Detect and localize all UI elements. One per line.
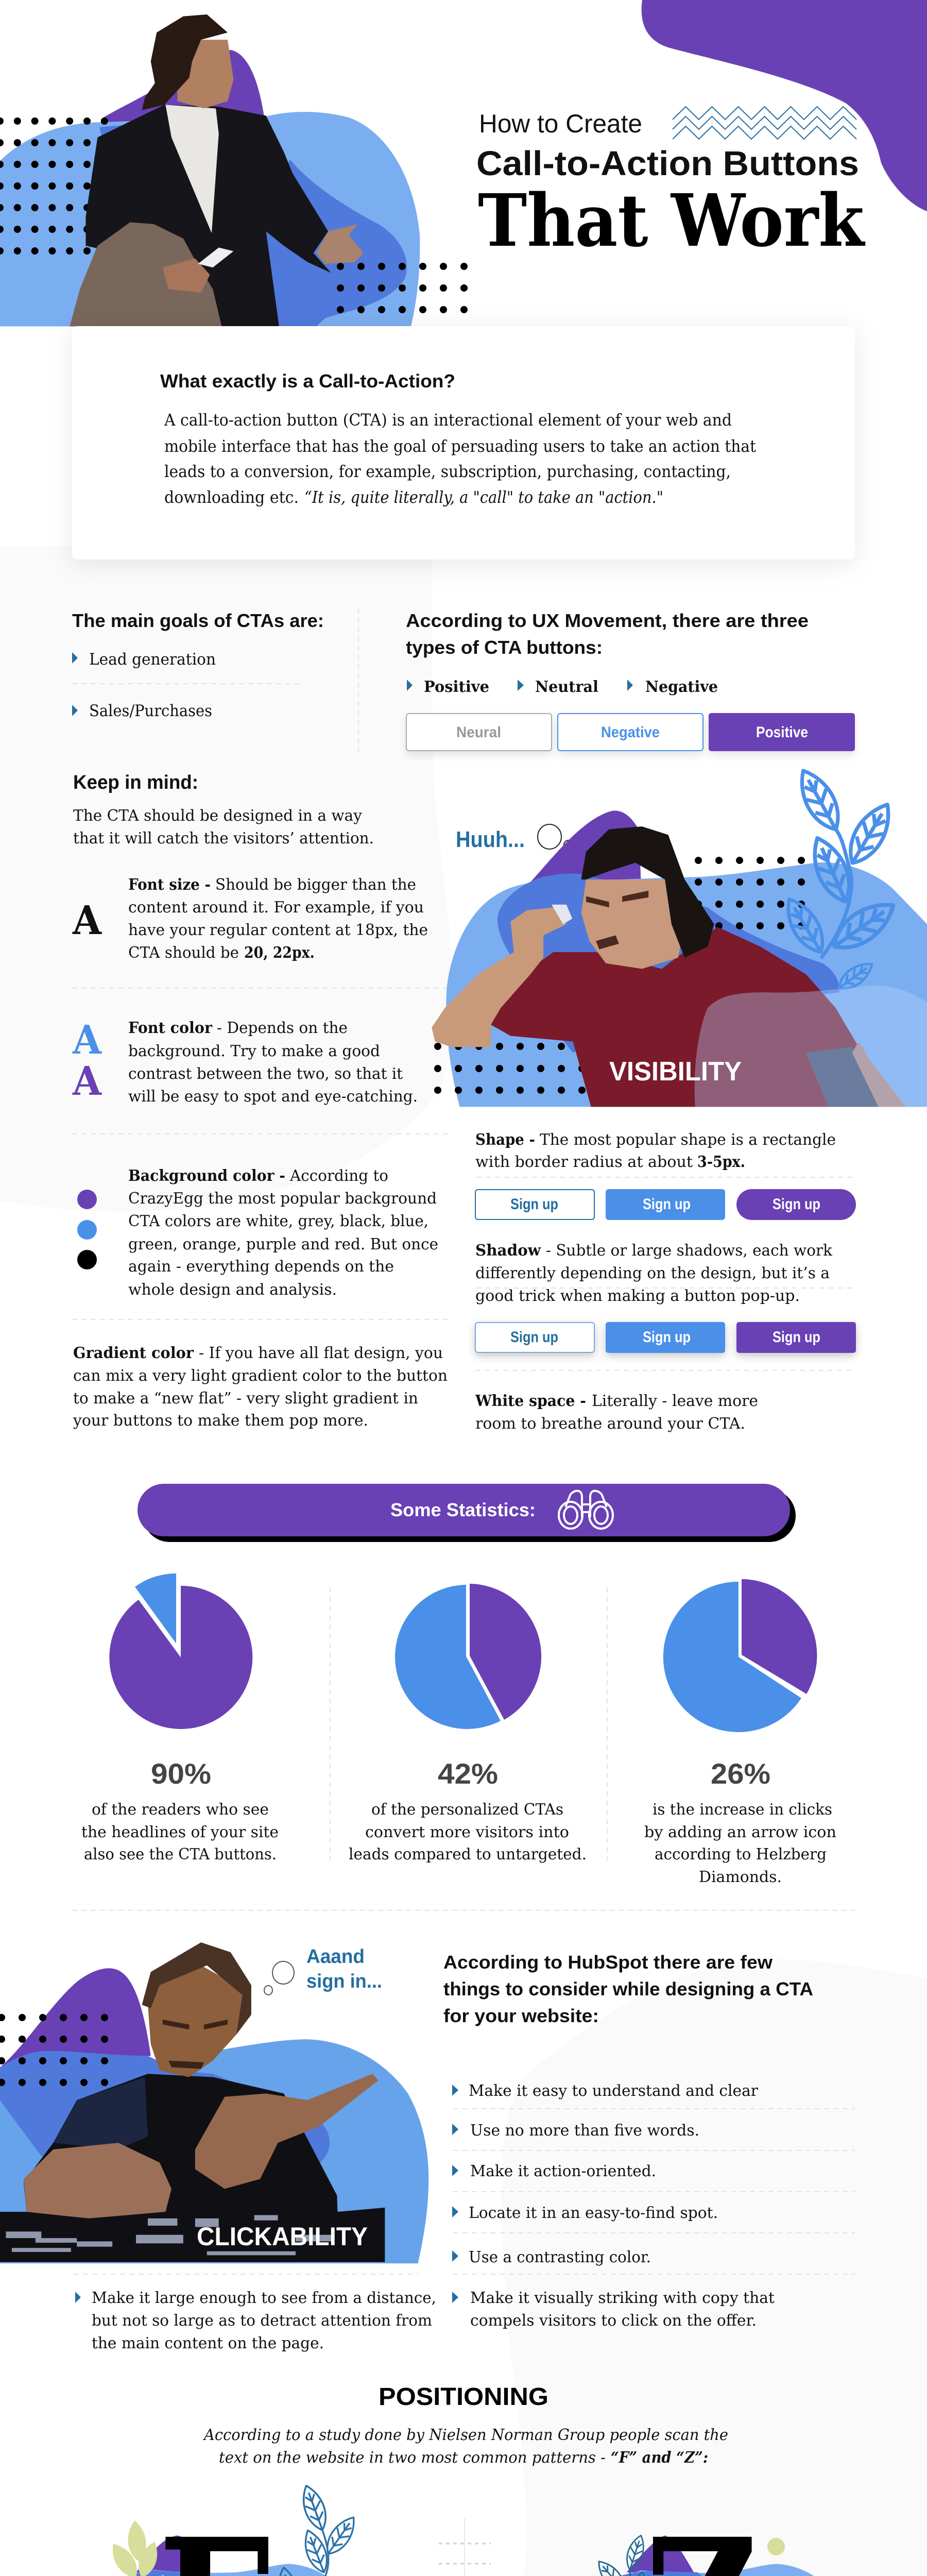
stat: 42%: 42% — [438, 1757, 498, 1790]
header illustration — [0, 0, 927, 326]
types bullets: Neutral — [535, 678, 598, 696]
button: negative — [558, 714, 703, 751]
caption: Huuh: Huuh... — [456, 827, 525, 852]
illustration: Z pattern — [562, 2492, 856, 2576]
main goals list — [72, 610, 324, 720]
three types of CTA: types of CTA buttons: — [406, 637, 603, 658]
tip: gradient color — [73, 1344, 448, 1430]
photo: man pointing — [0, 1942, 385, 2262]
intro: positioning: According to a study done by Nielsen Norman Group people scan the — [202, 2426, 728, 2444]
icon: leaf plant — [779, 764, 901, 995]
decoration: zigzag — [673, 107, 856, 139]
photo: man squinting — [432, 826, 927, 1107]
tip: background color: CTA colors are white, grey, black, blue, — [128, 1212, 428, 1230]
heading: What exactly is a Call-to-Action? — [160, 370, 455, 392]
button: neural — [406, 714, 552, 751]
tip: background color — [77, 1167, 438, 1299]
hubspot heading: for your website: — [443, 2005, 599, 2026]
keep in mind: that it will catch the visitors’ attention. — [73, 829, 374, 848]
hubspot list: Locate it in an easy-to-find spot. — [469, 2204, 718, 2222]
stat: 26%: according to Helzberg — [655, 1845, 827, 1863]
icon: blue and purple letter A: A — [72, 1017, 102, 1063]
buttons: shape examples — [475, 1189, 856, 1220]
stat: 90%: also see the CTA buttons. — [84, 1845, 277, 1863]
tip: font size: CTA should be — [128, 944, 239, 962]
buttons: shadow examples: Sign up — [643, 1329, 691, 1346]
tip: font size: Font size - — [128, 876, 211, 894]
stat: 90% — [81, 1757, 279, 1863]
definition text: downloading etc. — [164, 487, 299, 507]
dots: upper — [698, 860, 803, 926]
tip: white space — [475, 1392, 758, 1433]
button: positive — [709, 713, 855, 751]
hubspot heading: According to HubSpot there are few — [443, 1952, 773, 1973]
green oval — [767, 2538, 785, 2555]
stat: 26%: by adding an arrow icon — [644, 1823, 836, 1841]
main goals list: The main goals of CTAs are: — [72, 610, 324, 631]
background blob: right grey — [501, 1959, 927, 2576]
hubspot list: Use no more than five words. — [470, 2122, 699, 2140]
tip: background color: again - everything depends on the — [128, 1258, 394, 1276]
tip: font color: background. Try to make a good — [128, 1042, 380, 1060]
tip: gradient color: to make a “new flat” - very slight gradient in — [73, 1389, 418, 1408]
stat: 42% — [349, 1757, 587, 1863]
tip: font size: content around it. For example, if you — [128, 899, 424, 917]
tip: font color: Font color — [128, 1019, 213, 1037]
three types of CTA — [406, 610, 855, 751]
tip: shadow: Shadow — [475, 1242, 541, 1260]
title — [476, 109, 866, 263]
button: negative: Negative — [601, 724, 660, 741]
stat: 26% — [644, 1757, 836, 1886]
tip: gradient color: can mix a very light gradient color to the button — [73, 1367, 448, 1385]
blobs — [88, 2535, 355, 2576]
illustration: F pattern — [75, 2482, 369, 2576]
icon: blue and purple letter A — [72, 1017, 102, 1105]
tip: background color: whole design and analysis. — [128, 1281, 337, 1299]
definition text: “It is, quite literally, a "call" to take an "action." — [304, 487, 663, 507]
stat: 90%: of the readers who see — [92, 1801, 269, 1819]
definition text — [164, 410, 756, 507]
bullet: visually striking: Make it visually striking with copy that — [470, 2289, 775, 2307]
bullet: large enough: but not so large as to detract attention from — [92, 2312, 432, 2330]
bullet: large enough — [75, 2289, 436, 2352]
bullet: visually striking: compels visitors to click on the offer. — [470, 2312, 757, 2330]
hubspot list: Make it easy to understand and clear — [469, 2082, 759, 2100]
buttons: shadow examples — [475, 1322, 856, 1353]
caption: aaand sign in — [306, 1946, 382, 1992]
tip: shape: The most popular shape is a rectangle — [540, 1131, 836, 1149]
three types of CTA: According to UX Movement, there are three — [406, 610, 809, 631]
photo: man in suit — [70, 14, 364, 326]
types bullets: Positive — [424, 678, 489, 696]
intro: positioning: “F” and “Z”: — [611, 2449, 708, 2467]
header blobs — [0, 50, 420, 326]
buttons: shape examples: Sign up — [772, 1196, 820, 1213]
tip: gradient color: Gradient color — [73, 1344, 194, 1362]
tip: shadow: good trick when making a button pop-up. — [475, 1287, 800, 1305]
button: neural: Neural — [456, 724, 501, 741]
tip: font size: 20, 22px. — [244, 944, 315, 962]
icon: binoculars — [559, 1491, 613, 1529]
title: How to Create — [479, 109, 642, 138]
icon: green plant — [106, 2520, 183, 2576]
hubspot heading: things to consider while designing a CTA — [443, 1978, 813, 1999]
stat: 42%: leads compared to untargeted. — [349, 1845, 587, 1863]
intro: positioning — [202, 2426, 728, 2467]
bullet: lead generation: Lead generation — [89, 650, 216, 669]
bullet: visually striking — [452, 2289, 775, 2330]
stat: 26%: 26% — [711, 1757, 770, 1790]
tip: shadow: - Subtle or large shadows, each work — [546, 1242, 833, 1260]
tip: white space: White space - — [475, 1392, 586, 1410]
types bullets — [407, 678, 718, 696]
blobs — [0, 1968, 428, 2263]
definition text: A call-to-action button (CTA) is an interactional element of your web and — [164, 410, 732, 430]
background blob: upper left grey — [0, 546, 453, 1211]
icon: letter A: A — [72, 897, 102, 944]
tip: gradient color: - If you have all flat design, you — [199, 1344, 443, 1362]
tip: font color: contrast between the two, so that it — [128, 1065, 403, 1083]
dots: lower — [438, 1046, 585, 1090]
keep in mind: The CTA should be designed in a way — [73, 807, 362, 825]
heading: positioning: POSITIONING — [379, 2383, 548, 2411]
tip: shape: 3-5px. — [697, 1153, 745, 1171]
buttons: shape examples: Sign up — [643, 1196, 691, 1213]
button: positive: Positive — [756, 724, 808, 741]
tip: gradient color: your buttons to make them pop more. — [73, 1412, 368, 1430]
tip: font size — [72, 876, 428, 962]
bullet: large enough: the main content on the page. — [92, 2334, 324, 2352]
buttons: shadow examples: Sign up — [510, 1329, 558, 1346]
tip: background color: green, orange, purple and red. But once — [128, 1235, 438, 1253]
dots: header left — [0, 121, 108, 251]
hubspot heading — [443, 1952, 813, 2026]
blob: top right purple — [642, 0, 927, 211]
panel: what is a CTA — [72, 326, 855, 560]
keep in mind — [73, 772, 374, 848]
definition text: mobile interface that has the goal of persuading users to take an action that — [164, 436, 756, 456]
tip: font color: - Depends on the — [217, 1019, 348, 1037]
tip: font size: Should be bigger than the — [215, 876, 416, 894]
tip: shape: with border radius at about — [475, 1153, 693, 1171]
blobs — [576, 2535, 843, 2576]
blobs — [446, 810, 927, 1107]
icon: thought bubbles — [264, 1961, 294, 1995]
tip: font color — [72, 1017, 418, 1106]
stat: 90%: 90% — [151, 1757, 211, 1790]
banner: some statistics: Some Statistics: — [390, 1499, 536, 1520]
icon: thought bubbles — [538, 824, 573, 850]
tip: shape — [475, 1131, 836, 1171]
tip: white space: Literally - leave more — [592, 1392, 758, 1410]
stat: 26%: is the increase in clicks — [653, 1801, 832, 1819]
icon: blue and purple letter A: A — [72, 1058, 102, 1105]
pie chart: 26% — [663, 1579, 817, 1732]
hubspot list — [452, 2082, 855, 2274]
tip: font color: will be easy to spot and eye-catching. — [128, 1088, 418, 1106]
definition text: leads to a conversion, for example, subscription, purchasing, contacting, — [164, 462, 731, 481]
stat: 42%: convert more visitors into — [365, 1823, 569, 1841]
icon: blue plant — [266, 2482, 361, 2576]
caption: visibility: VISIBILITY — [609, 1057, 742, 1087]
types bullets: Negative — [645, 678, 718, 696]
dots: header right — [340, 266, 466, 310]
icon: colour dots — [77, 1190, 97, 1269]
center divider — [439, 2518, 491, 2576]
tip: font size: have your regular content at 18px, the — [128, 921, 428, 939]
pie chart: 90% — [109, 1573, 252, 1729]
tip: background color: Background color - — [128, 1167, 285, 1185]
keep in mind: Keep in mind: — [73, 772, 198, 793]
tip: white space: room to breathe around your CTA. — [475, 1415, 745, 1433]
stat: 26%: Diamonds. — [699, 1868, 782, 1886]
tip: background color: CrazyEgg the most popular background — [128, 1190, 437, 1208]
buttons: shape examples: Sign up — [510, 1196, 558, 1213]
title: That Work — [478, 179, 866, 263]
bullet: sales: Sales/Purchases — [89, 702, 212, 720]
tip: shadow: differently depending on the design, but it’s a — [475, 1264, 830, 1282]
title: Call-to-Action Buttons — [476, 144, 859, 183]
caption: aaand sign in: Aaand — [306, 1946, 365, 1968]
dots — [2, 2018, 108, 2082]
hubspot list: Use a contrasting color. — [469, 2248, 651, 2266]
illustration: visibility — [432, 764, 927, 1107]
intro: positioning: text on the website in two most common patterns - — [219, 2449, 606, 2467]
tip: shadow — [475, 1242, 855, 1305]
bullet: large enough: Make it large enough to see from a distance, — [92, 2289, 436, 2307]
tip: background color: According to — [289, 1167, 388, 1185]
stat: 90%: the headlines of your site — [81, 1823, 279, 1841]
tip: shape: Shape - — [475, 1131, 535, 1149]
icon: teal plant — [593, 2533, 670, 2576]
translucent blob over photo — [695, 986, 927, 1107]
banner: some statistics — [138, 1484, 796, 1542]
caption: aaand sign in: sign in... — [306, 1971, 382, 1992]
hubspot list: Make it action-oriented. — [470, 2162, 656, 2180]
caption: clickability: CLICKABILITY — [197, 2222, 368, 2251]
illustration: clickability — [0, 1942, 428, 2263]
pie chart: 42% — [395, 1584, 541, 1729]
buttons: shadow examples: Sign up — [772, 1329, 820, 1346]
stat: 42%: of the personalized CTAs — [371, 1801, 563, 1819]
